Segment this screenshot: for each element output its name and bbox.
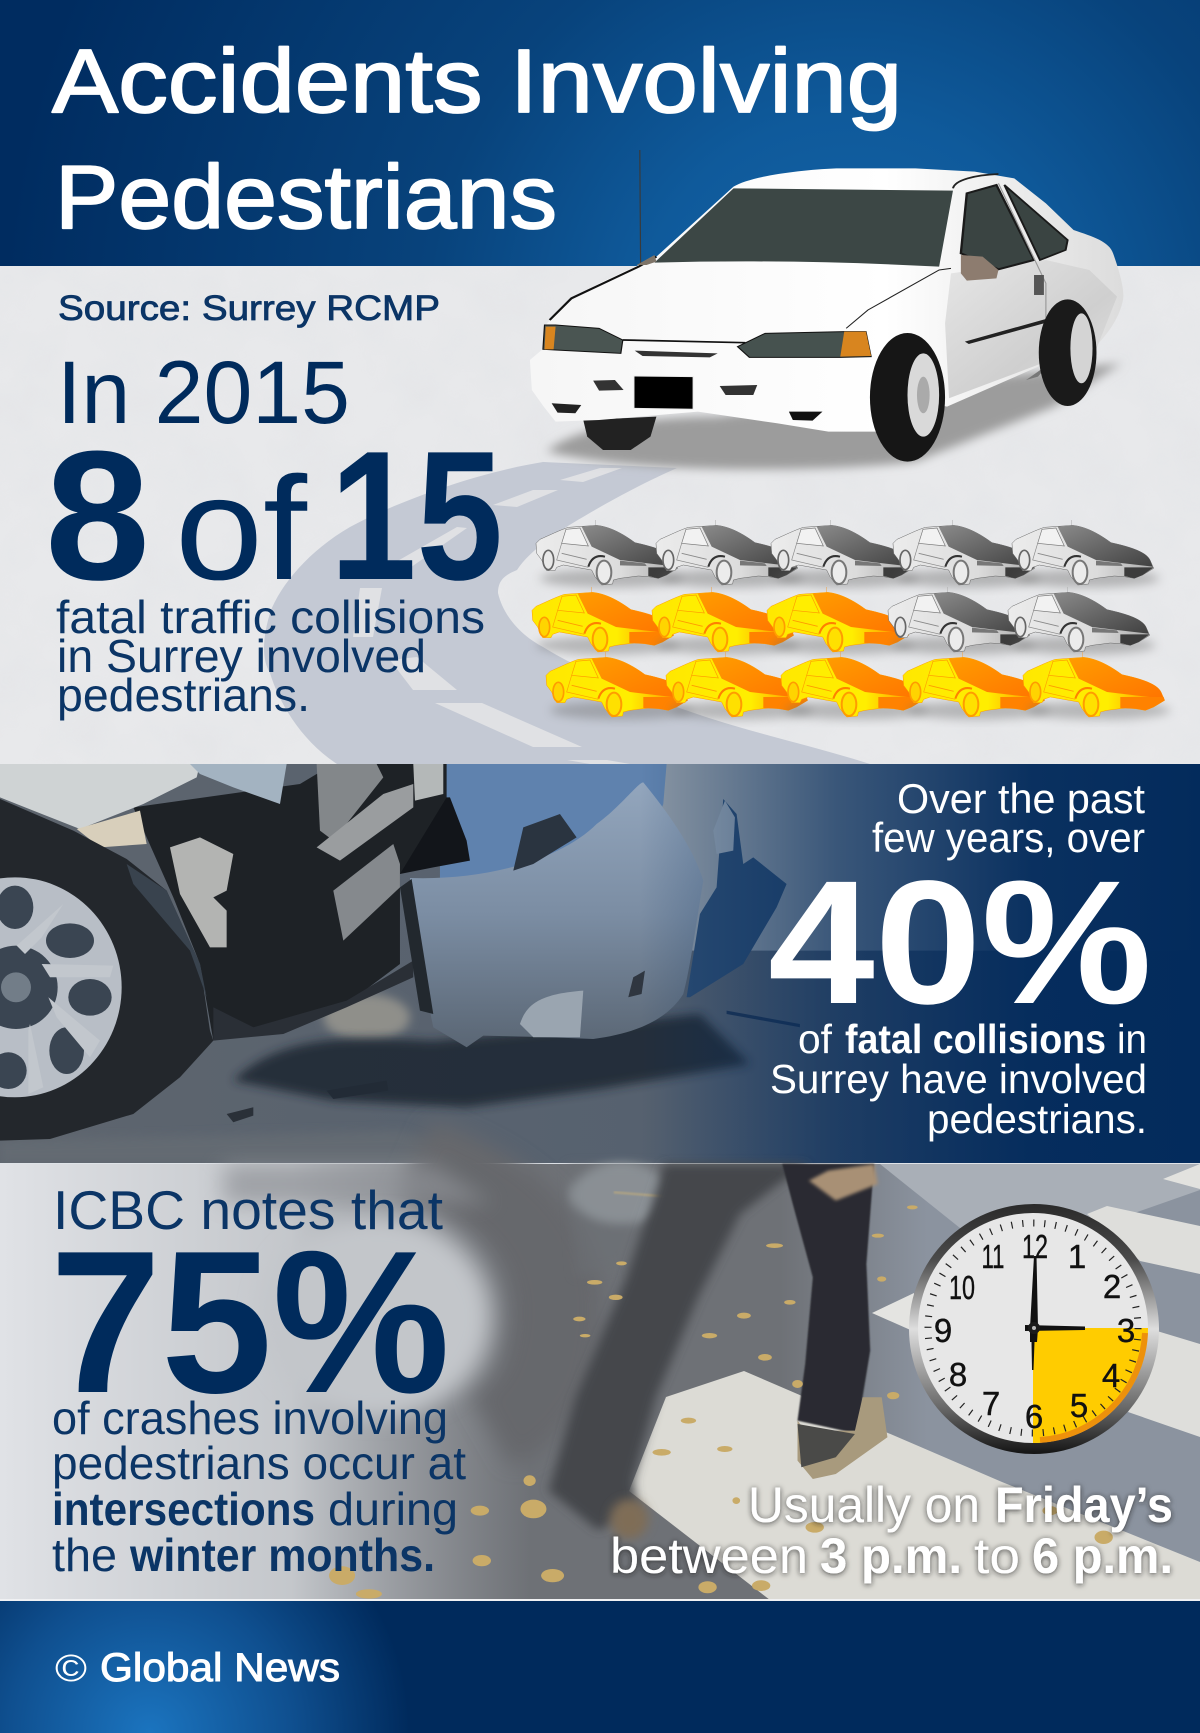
- text: crashes at intersections: [52, 1392, 466, 1581]
- icon: clock 3 to 6: 8: [949, 1356, 967, 1393]
- copyright credit: Global News: [100, 1646, 340, 1690]
- title: [52, 32, 902, 248]
- title: Pedestrians: [55, 148, 557, 248]
- icon: clock 3 to 6: 5: [1070, 1387, 1088, 1424]
- title: Accidents Involving: [52, 32, 902, 132]
- icon: clock 3 to 6: 10: [949, 1269, 975, 1306]
- text: over the past few years: Over the past: [897, 775, 1145, 822]
- panel: 40 percent statistic: [0, 764, 1200, 1164]
- description text: pedestrians.: [57, 669, 310, 721]
- panel: 2015 statistic: [0, 150, 1200, 764]
- 8 of 15: [45, 412, 503, 618]
- photo: damaged car: [0, 764, 1200, 1164]
- text: over the past few years: [872, 775, 1145, 861]
- in 2015: In 2015: [57, 342, 350, 442]
- text: over the past few years: few years, over: [872, 814, 1145, 861]
- panel: 75 percent statistic: [0, 1157, 1200, 1600]
- text: crashes at intersections: during: [328, 1483, 458, 1535]
- text: fatal collisions: Surrey have involved: [770, 1056, 1147, 1102]
- icon: clock 3 to 6: 7: [982, 1385, 1000, 1422]
- text: crashes at intersections: pedestrians occur at: [52, 1437, 466, 1489]
- divider line: [0, 1163, 1200, 1164]
- 8 of 15: of: [175, 447, 308, 611]
- 75 percent figure: 75%: [50, 1209, 450, 1436]
- description text: in Surrey involved: [57, 630, 426, 682]
- 8 of 15: 8: [45, 412, 150, 618]
- text: ICBC notes that: ICBC notes that: [53, 1179, 443, 1241]
- icon: clock 3 to 6: 3: [1117, 1312, 1135, 1349]
- icon: clock 3 to 6: 1: [1068, 1238, 1086, 1275]
- text: Fridays between 3 and 6: Friday’s: [995, 1477, 1173, 1533]
- text: crashes at intersections: of crashes involving: [52, 1392, 448, 1444]
- text: Fridays between 3 and 6: 6 p.m.: [1032, 1528, 1173, 1584]
- icon: clock 3 to 6: 6: [1025, 1398, 1043, 1435]
- icon: clock 3 to 6: 2: [1103, 1268, 1121, 1305]
- text: fatal collisions: of: [798, 1016, 833, 1062]
- text: Fridays between 3 and 6: 3 p.m.: [820, 1528, 962, 1584]
- pictogram: fifteen cars: [532, 520, 1170, 720]
- description text: fatal traffic collisions: [56, 591, 485, 643]
- panel: header: [0, 0, 1200, 266]
- road illustration: [264, 462, 870, 764]
- text: Fridays between 3 and 6: Usually on: [748, 1477, 980, 1533]
- text: fatal collisions: pedestrians.: [927, 1096, 1147, 1142]
- text: fatal collisions: fatal collisions: [845, 1016, 1106, 1062]
- panel: footer: [0, 1601, 1200, 1733]
- text: crashes at intersections: winter months.: [129, 1529, 435, 1581]
- icon: clock 3 to 6: 12: [1022, 1228, 1048, 1265]
- icon: clock 3 to 6: 4: [1102, 1357, 1120, 1394]
- icon: clock 3 to 6: [909, 1204, 1159, 1454]
- divider line: [0, 1599, 1200, 1601]
- photo: pedestrian on crosswalk: [0, 1157, 1200, 1600]
- icon: clock 3 to 6: 11: [982, 1238, 1004, 1275]
- description text: [56, 591, 485, 721]
- illustration: white car: [530, 150, 1123, 469]
- text: Fridays between 3 and 6: to: [974, 1528, 1020, 1584]
- text: fatal collisions: [770, 1016, 1147, 1142]
- 40 percent figure: 40%: [768, 845, 1152, 1041]
- text: fatal collisions: in: [1117, 1016, 1147, 1062]
- text: Fridays between 3 and 6: [610, 1477, 1173, 1584]
- copyright credit: ©: [55, 1648, 87, 1690]
- text: Fridays between 3 and 6: between: [610, 1528, 808, 1584]
- source line: Source: Surrey RCMP: [58, 289, 440, 328]
- 8 of 15: 15: [330, 412, 503, 618]
- icon: clock 3 to 6: 9: [934, 1312, 952, 1349]
- text: crashes at intersections: the: [52, 1529, 117, 1581]
- text: crashes at intersections: intersections: [52, 1483, 315, 1535]
